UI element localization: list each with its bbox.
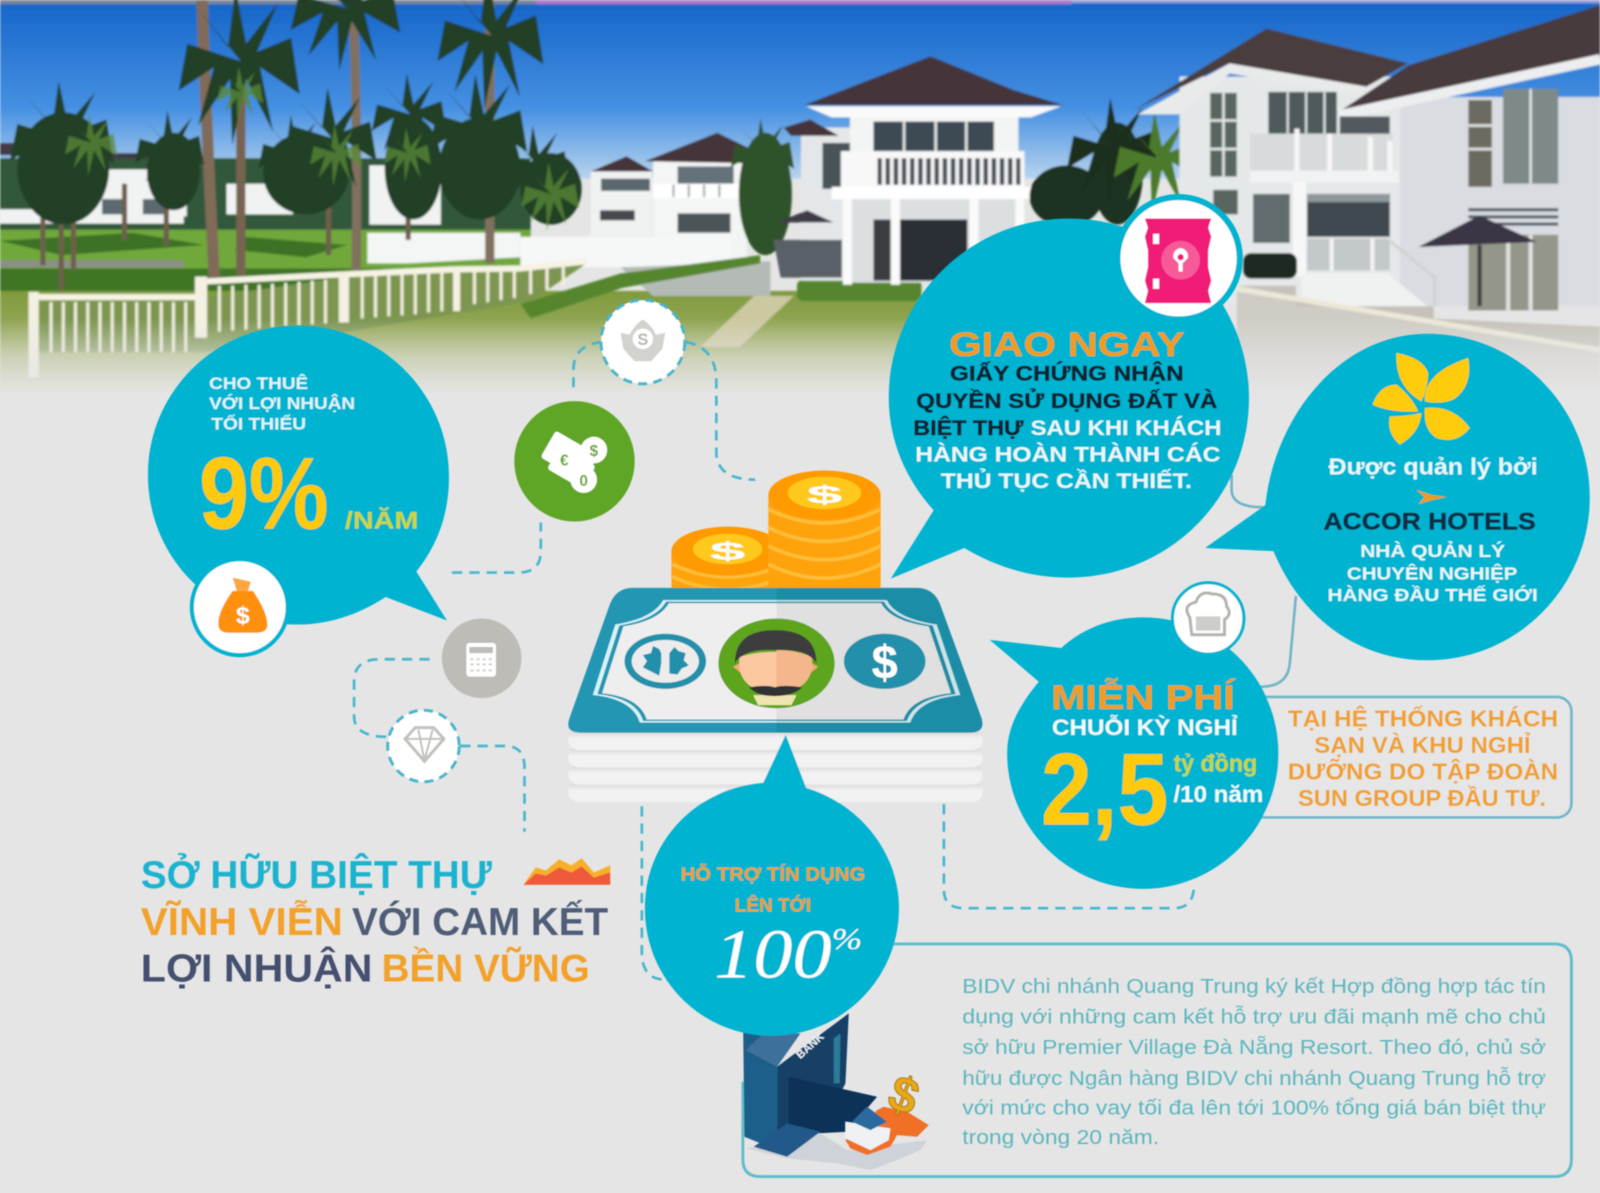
right palm trees (1030, 97, 1200, 227)
distant villas on the left (0, 143, 531, 235)
text box: Sun Group: DƯỠNG DO TẬP ĐOÀN (1288, 758, 1558, 785)
credit support label: LÊN TỚI (735, 894, 811, 915)
icon: bank building with house and dollar (743, 1013, 929, 1170)
credit support label: HỖ TRỢ TÍN DỤNG (681, 864, 865, 885)
left side planting under the fence (39, 263, 587, 352)
BIDV paragraph: trong vòng 20 năm. (962, 1127, 1159, 1149)
pool and hedge (520, 255, 921, 347)
panel: 9 percent rental yield bubble (148, 326, 449, 655)
panel: BIDV text box (743, 944, 1571, 1177)
text box: Sun Group: SUN GROUP ĐẦU TƯ. (1298, 784, 1546, 811)
bill emblem right: $ (872, 637, 898, 689)
BIDV paragraph: BIDV chi nhánh Quang Trung ký kết Hợp đồng hợp tác tín (962, 976, 1546, 998)
free headline: MIỄN PHÍ (1051, 677, 1236, 717)
icon: green circle with bills and coins: € (560, 452, 569, 469)
icon: money bag (192, 559, 288, 655)
2.5 figure: 2,5 (1041, 733, 1168, 847)
rental yield label: VỚI LỢI NHUẬN (209, 394, 355, 413)
lawn and hedges left (0, 230, 918, 393)
icon: yellow flower (1372, 353, 1470, 445)
panel: 100 percent credit bubble: % (832, 922, 862, 956)
title: own a villa: BỀN VỮNG (382, 947, 590, 991)
bill portrait (718, 618, 835, 708)
title: own a villa: VỚI CAM KẾT (352, 900, 608, 944)
professional manager text: NHÀ QUẢN LÝ (1360, 541, 1506, 561)
per year label: /NĂM (345, 507, 418, 535)
bill emblem left (624, 634, 706, 689)
BIDV paragraph: dụng với những cam kết hỗ trợ ưu đãi mạnh mẽ cho chủ (962, 1006, 1546, 1029)
icon: small area chart (523, 858, 610, 885)
tree between villas (731, 118, 794, 255)
professional manager text (1328, 541, 1538, 605)
icon: green circle with bills and coins: $ (590, 443, 599, 460)
delivery text: GIẤY CHỨNG NHẬN (950, 361, 1184, 386)
icon: seal with dollar (601, 300, 685, 384)
icon: bank building with house and dollar: BANK (794, 1030, 827, 1062)
icon: green circle with bills and coins (514, 401, 635, 522)
text box: Sun Group: SẠN VÀ KHU NGHỈ (1314, 730, 1531, 758)
fence (29, 261, 587, 378)
9 percent figure: 9% (199, 437, 329, 551)
right villas (1134, 5, 1600, 393)
panel: immediate delivery bubble (889, 197, 1249, 579)
icon: seal with dollar: S (637, 331, 648, 349)
professional manager text: HÀNG ĐẦU THẾ GIỚI (1328, 585, 1538, 605)
coin stacks (671, 470, 881, 592)
credit support label (681, 864, 865, 915)
icon: diamond (388, 710, 459, 782)
delivery text: SAU KHI KHÁCH (1031, 415, 1221, 440)
hero photo: resort villas (0, 0, 1600, 395)
text box: Sun Group: TẠI HỆ THỐNG KHÁCH (1288, 705, 1558, 732)
holiday chain label: CHUỖI KỲ NGHỈ (1052, 714, 1238, 740)
money stack (568, 588, 983, 802)
panel: 100 percent credit bubble (645, 735, 899, 1036)
back villas centre (520, 133, 763, 286)
billion dong label: tỷ đồng (1173, 751, 1257, 778)
icon: pink barrel (1117, 197, 1240, 319)
100 percent figure: 100 (714, 917, 832, 994)
solid connector lines (1232, 475, 1296, 687)
icon: green circle with bills and coins: 0 (579, 473, 588, 490)
BIDV paragraph: với mức cho vay tối đa lên tới 100% tổng giá bán biệt thự (962, 1097, 1546, 1119)
Accor Hotels name: ACCOR HOTELS (1323, 509, 1536, 536)
coin stacks: $ (710, 537, 745, 565)
title: own a villa: LỢI NHUẬN (141, 947, 372, 991)
bill emblem right (844, 634, 926, 689)
icon: cloud computer (1172, 583, 1244, 654)
icon: Accor arrow (1416, 490, 1447, 504)
professional manager text: CHUYÊN NGHIỆP (1347, 564, 1517, 584)
text box: Sun Group (1250, 697, 1571, 817)
title: own a villa: VĨNH VIỄN (141, 900, 343, 944)
panel: Accor Hotels bubble (1205, 334, 1590, 660)
delivery headline: GIAO NGAY (949, 326, 1185, 364)
icon: calculator (442, 618, 521, 698)
icon: money bag: $ (236, 603, 250, 630)
fade of photo into the page background (0, 318, 1600, 395)
dashed connector lines (354, 342, 1194, 980)
delivery text: THỦ TỤC CẦN THIẾT. (941, 468, 1192, 493)
rental yield label (209, 374, 355, 434)
coin stacks: $ (807, 481, 842, 509)
delivery text: BIỆT THỰ (913, 415, 1024, 440)
palm trees (10, 0, 582, 291)
rental yield label: CHO THUÊ (209, 374, 308, 393)
title: own a villa: SỞ HỮU BIỆT THỰ (141, 853, 493, 897)
title: own a villa (141, 853, 608, 991)
managed by label: Được quản lý bởi (1329, 454, 1538, 480)
delivery text: HÀNG HOÀN THÀNH CÁC (915, 441, 1220, 466)
panel: free holiday chain bubble (990, 583, 1279, 889)
delivery text: QUYỀN SỬ DỤNG ĐẤT VÀ (916, 388, 1217, 413)
BIDV paragraph: sở hữu Premier Village Đà Nẵng Resort. Theo đó, chủ sở (962, 1036, 1546, 1059)
icon: bank building with house and dollar: $ (881, 1064, 927, 1126)
centre villa (773, 56, 1063, 285)
per ten years label: /10 năm (1173, 781, 1263, 807)
BIDV paragraph: hữu được Ngân hàng BIDV chi nhánh Quang Trung hỗ trợ (962, 1067, 1546, 1090)
rental yield label: TỐI THIỂU (211, 414, 306, 434)
delivery text (913, 361, 1221, 493)
BIDV paragraph (962, 976, 1546, 1149)
